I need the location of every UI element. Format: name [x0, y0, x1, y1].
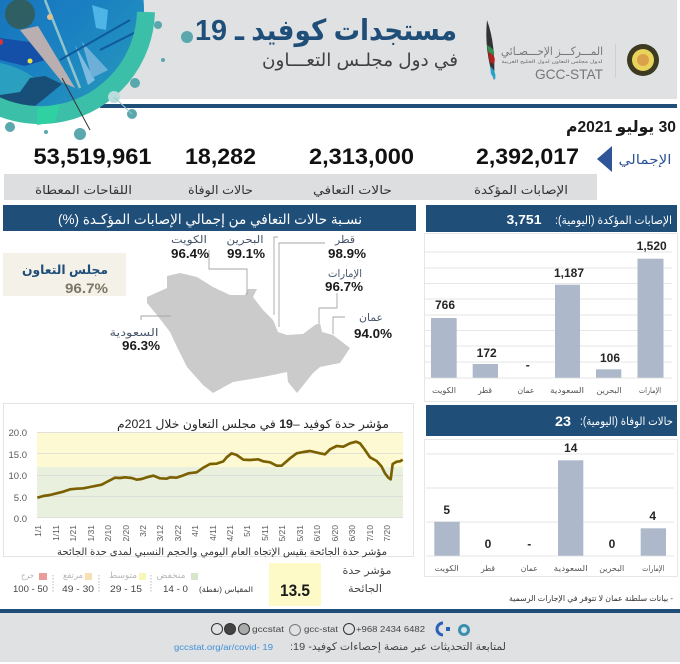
x axis date labels: 5/1: [242, 525, 252, 537]
y axis labels: 20.0: [8, 428, 27, 439]
label: Kuwait: [171, 234, 209, 261]
country labels: عمان: [521, 564, 538, 573]
severity scale legend: 49 - 30: [62, 584, 94, 595]
severity scale legend: 14 - 0: [163, 584, 188, 595]
subtitle: في دول مجلـس التعـــاون: [262, 50, 458, 71]
severity value box: 13.5: [280, 582, 310, 600]
country labels: قطر: [480, 564, 495, 573]
x axis date labels: 1/11: [51, 525, 61, 541]
country labels: الإمارات: [642, 564, 664, 574]
bars: [431, 259, 664, 378]
gridlines: [37, 432, 403, 518]
bar values: [443, 441, 656, 551]
label: Bahrain: [226, 234, 265, 261]
GCC-STAT logo: المـــركـــز الإحـــصـائي: [501, 46, 603, 59]
y axis labels: 10.0: [8, 471, 27, 482]
GCC-STAT logo: [486, 20, 659, 82]
label: UAE: الإمارات: [328, 268, 362, 280]
bar values: 172: [477, 346, 497, 360]
country labels: البحرين: [596, 386, 622, 395]
x axis date labels: 4/1: [190, 525, 200, 537]
stat values: 53,519,961: [34, 144, 152, 169]
bar values: 4: [649, 509, 656, 523]
severity scale legend: حرج: [21, 570, 34, 580]
y axis labels: 0.0: [14, 514, 27, 525]
x axis date labels: 1/31: [86, 525, 96, 542]
panel: recovery rate map: [3, 205, 416, 393]
label: Oman: 94.0%: [354, 326, 392, 341]
stat values: 2,313,000: [309, 144, 414, 169]
header band: [100, 0, 677, 99]
x axis date labels: 2/20: [121, 525, 131, 542]
GCC average callout: [3, 253, 126, 296]
label: Bahrain: 99.1%: [227, 246, 265, 261]
label: UAE: [325, 268, 363, 294]
footer link line: [174, 641, 506, 653]
x axis date labels: 6/30: [347, 525, 357, 542]
severity scale legend: منخفض: [156, 570, 186, 580]
x axis date labels: 1/21: [68, 525, 78, 542]
x axis date labels: 5/31: [295, 525, 305, 542]
bar values: 0: [485, 537, 492, 551]
chart caption: مؤشر حدة الجائحة بقيس الإتجاه العام اليومي والحجم النسبي لمدى حدة الجائحة: [57, 547, 387, 558]
map leader lines: [141, 237, 345, 334]
bar values: 1,520: [637, 239, 667, 253]
map of GCC: [147, 273, 350, 393]
partner logos: [437, 623, 470, 636]
country labels: السعودية: [554, 564, 588, 573]
bar values: [435, 239, 667, 372]
GCC average callout: مجلس التعاون: [22, 263, 108, 277]
contact text: [252, 624, 425, 634]
date: 30 يوليو 2021م: [566, 119, 676, 136]
stat labels bar: [4, 174, 597, 200]
deaths heading: [426, 405, 677, 436]
country labels: الكويت: [435, 564, 459, 573]
x axis date labels: 4/11: [208, 525, 218, 541]
severity indicator label: الجائحة: [348, 583, 382, 595]
country labels: البحرين: [599, 564, 624, 573]
label: Oman: عمان: [359, 312, 383, 324]
country labels: الكويت: [432, 386, 456, 395]
severity indicator label: [342, 565, 392, 595]
footnote: - بيانات سلطنة عمان لا تتوفر في الإجارات الرسمية: [509, 594, 673, 604]
bar values: 106: [600, 351, 620, 365]
severity value box: [269, 563, 321, 606]
x axis date labels: 1/1: [33, 525, 43, 537]
severity scale legend: متوسط: [109, 570, 137, 580]
totals label: [597, 146, 672, 172]
country labels: [432, 386, 661, 396]
GCC average callout: 96.7%: [65, 280, 109, 296]
severity scale legend: 100 - 50: [13, 584, 48, 595]
contact text: gcc-stat: [304, 624, 339, 634]
severity line: [37, 442, 403, 498]
header image: virus globe: [0, 0, 193, 140]
y axis labels: 5.0: [14, 493, 27, 504]
title: 19: [195, 15, 227, 47]
bar values: 14: [564, 441, 578, 455]
country labels: الإمارات: [639, 386, 661, 396]
y axis labels: 15.0: [8, 450, 27, 461]
bar values: 0: [609, 537, 616, 551]
x axis date labels: 3/2: [138, 525, 148, 537]
bar values: 5: [443, 503, 450, 517]
label: Saudi Arabia: السعودية: [110, 327, 158, 339]
panel: daily deaths bar chart: [424, 405, 678, 576]
x axis date labels: 7/10: [365, 525, 375, 542]
x axis date labels: [33, 525, 392, 542]
x axis date labels: 3/22: [173, 525, 183, 542]
contact text: gccstat: [252, 624, 285, 634]
label: Qatar: 98.9%: [328, 246, 366, 261]
label: Kuwait: 96.4%: [171, 246, 209, 261]
gridlines: [424, 252, 672, 378]
bar values: 766: [435, 298, 455, 312]
country labels: قطر: [477, 386, 492, 395]
x axis date labels: 3/12: [155, 525, 165, 542]
cases heading: [426, 205, 677, 232]
totals label: الإجمالي: [618, 152, 672, 167]
footer link line: gccstat.org/ar/covid- 19: [174, 642, 273, 652]
stat labels bar: الإصابات المؤكدة: [474, 183, 568, 198]
label: UAE: 96.7%: [325, 279, 363, 294]
label: Kuwait: الكويت: [171, 234, 207, 246]
x axis date labels: 7/20: [382, 525, 392, 542]
header rule: [100, 104, 677, 108]
x axis date labels: 6/20: [330, 525, 340, 542]
GCC-STAT logo: لدول مجلس التعاون لدول الخليج العربية: [502, 59, 602, 64]
title: مستجدات كوفيد ـ: [234, 15, 457, 47]
footer: [0, 609, 680, 662]
label: Qatar: [328, 234, 366, 261]
gridlines: [426, 454, 674, 556]
y axis labels: [8, 428, 27, 525]
recovery panel heading: نسـبة حالات التعافي من إجمالي الإصابات المؤكـدة (%): [58, 211, 362, 228]
label: Qatar: قطر: [334, 234, 355, 246]
label: Bahrain: البحرين: [226, 234, 264, 246]
recovery panel heading: [3, 205, 416, 231]
footer link line: لمتابعة التحديثات عبر منصة إحصاءات كوفيد- 19:: [290, 641, 506, 653]
stat labels bar: حالات التعافي: [313, 183, 392, 197]
stat labels bar: حالات الوفاة: [188, 183, 253, 198]
severity scale legend: [13, 570, 253, 595]
bar values: 1,187: [554, 266, 584, 280]
cases heading: الإصابات المؤكدة (اليومية):: [555, 215, 672, 228]
severity scale legend: مرتفع: [63, 570, 83, 580]
stat labels bar: اللقاحات المعطاة: [35, 183, 132, 197]
chart title: مؤشر حدة كوفيد –19 في مجلس التعاون خلال 2021م: [117, 417, 389, 432]
country labels: [435, 564, 664, 574]
country labels: عمان: [518, 386, 534, 395]
social icons: [212, 624, 354, 636]
deaths heading: 23: [555, 413, 571, 429]
panel: daily confirmed cases bar chart: [424, 205, 678, 402]
severity scale legend: المقياس (نقطة): [199, 585, 253, 594]
x axis date labels: 5/21: [277, 525, 287, 542]
contact text: +968 2434 6482: [356, 624, 425, 634]
stat values: [34, 144, 579, 169]
severity scale legend: 29 - 15: [110, 584, 142, 595]
label: Saudi Arabia: 96.3%: [122, 338, 160, 353]
bars: [434, 460, 666, 556]
stat values: 18,282: [185, 144, 256, 169]
panel: daily severity line chart: [4, 404, 414, 558]
severity bands: [37, 432, 403, 518]
bar values: -: [526, 358, 530, 372]
country labels: السعودية: [550, 386, 584, 395]
cases heading: 3,751: [506, 212, 542, 227]
severity indicator label: مؤشر حدة: [342, 565, 392, 577]
GCC-STAT logo: GCC-STAT: [535, 66, 603, 82]
x axis date labels: 2/10: [103, 525, 113, 542]
label: Oman: [354, 312, 392, 341]
label: Saudi Arabia: [110, 327, 160, 353]
x axis date labels: 5/11: [260, 525, 270, 541]
x axis date labels: 6/10: [312, 525, 322, 542]
bar values: -: [527, 537, 531, 551]
x axis date labels: 4/21: [225, 525, 235, 542]
stat values: 2,392,017: [476, 144, 579, 169]
